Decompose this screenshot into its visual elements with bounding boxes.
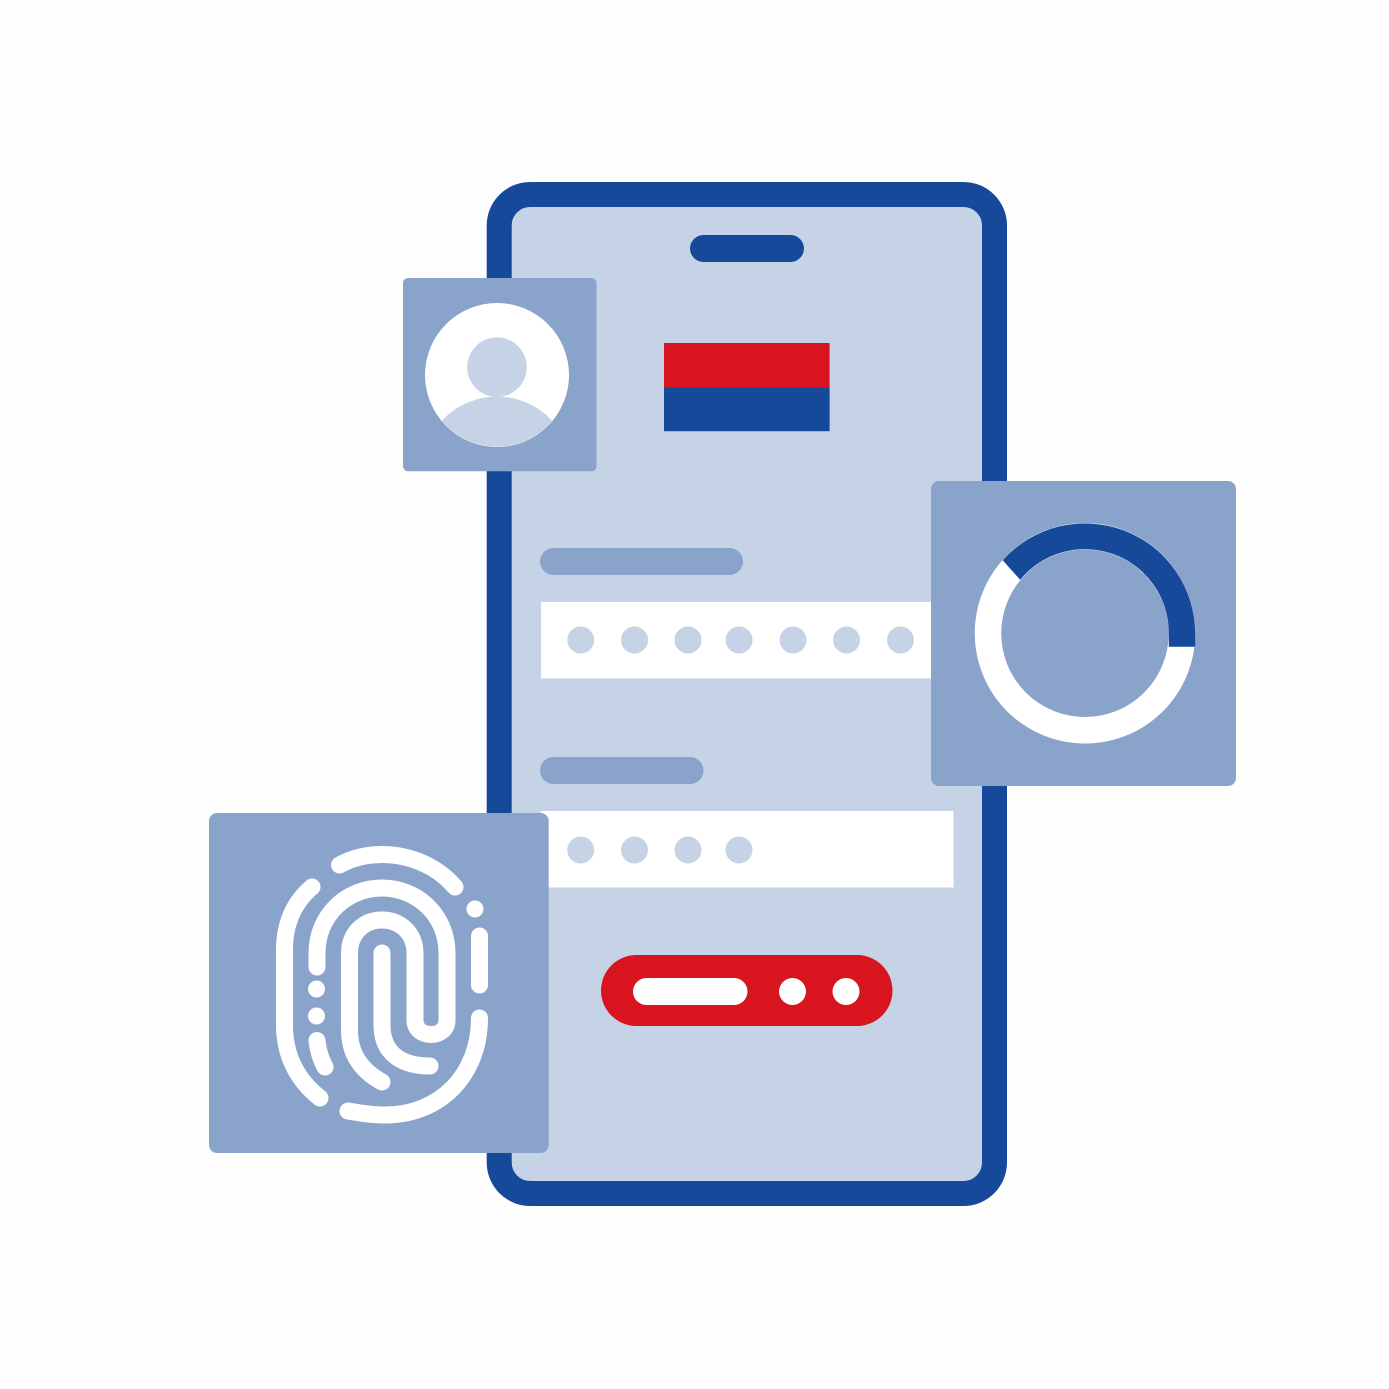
icon: fingerprint [284,854,480,1115]
icon: avatar shoulders [442,397,552,447]
phone body [499,194,994,1194]
password input field [541,811,954,888]
progress ring value [1003,523,1195,647]
panel: progress ring card [931,481,1236,786]
password label bar [540,757,704,784]
login button [601,955,892,1026]
phone notch [690,235,804,262]
phone [499,194,994,1194]
panel: user avatar card [403,278,596,471]
panel: fingerprint card [209,813,549,1153]
icon: avatar circle [425,303,569,447]
progress ring track [988,536,1182,730]
flag logo [664,343,830,431]
username input field [541,602,936,678]
username label bar [540,548,743,575]
icon: avatar head [467,337,527,397]
